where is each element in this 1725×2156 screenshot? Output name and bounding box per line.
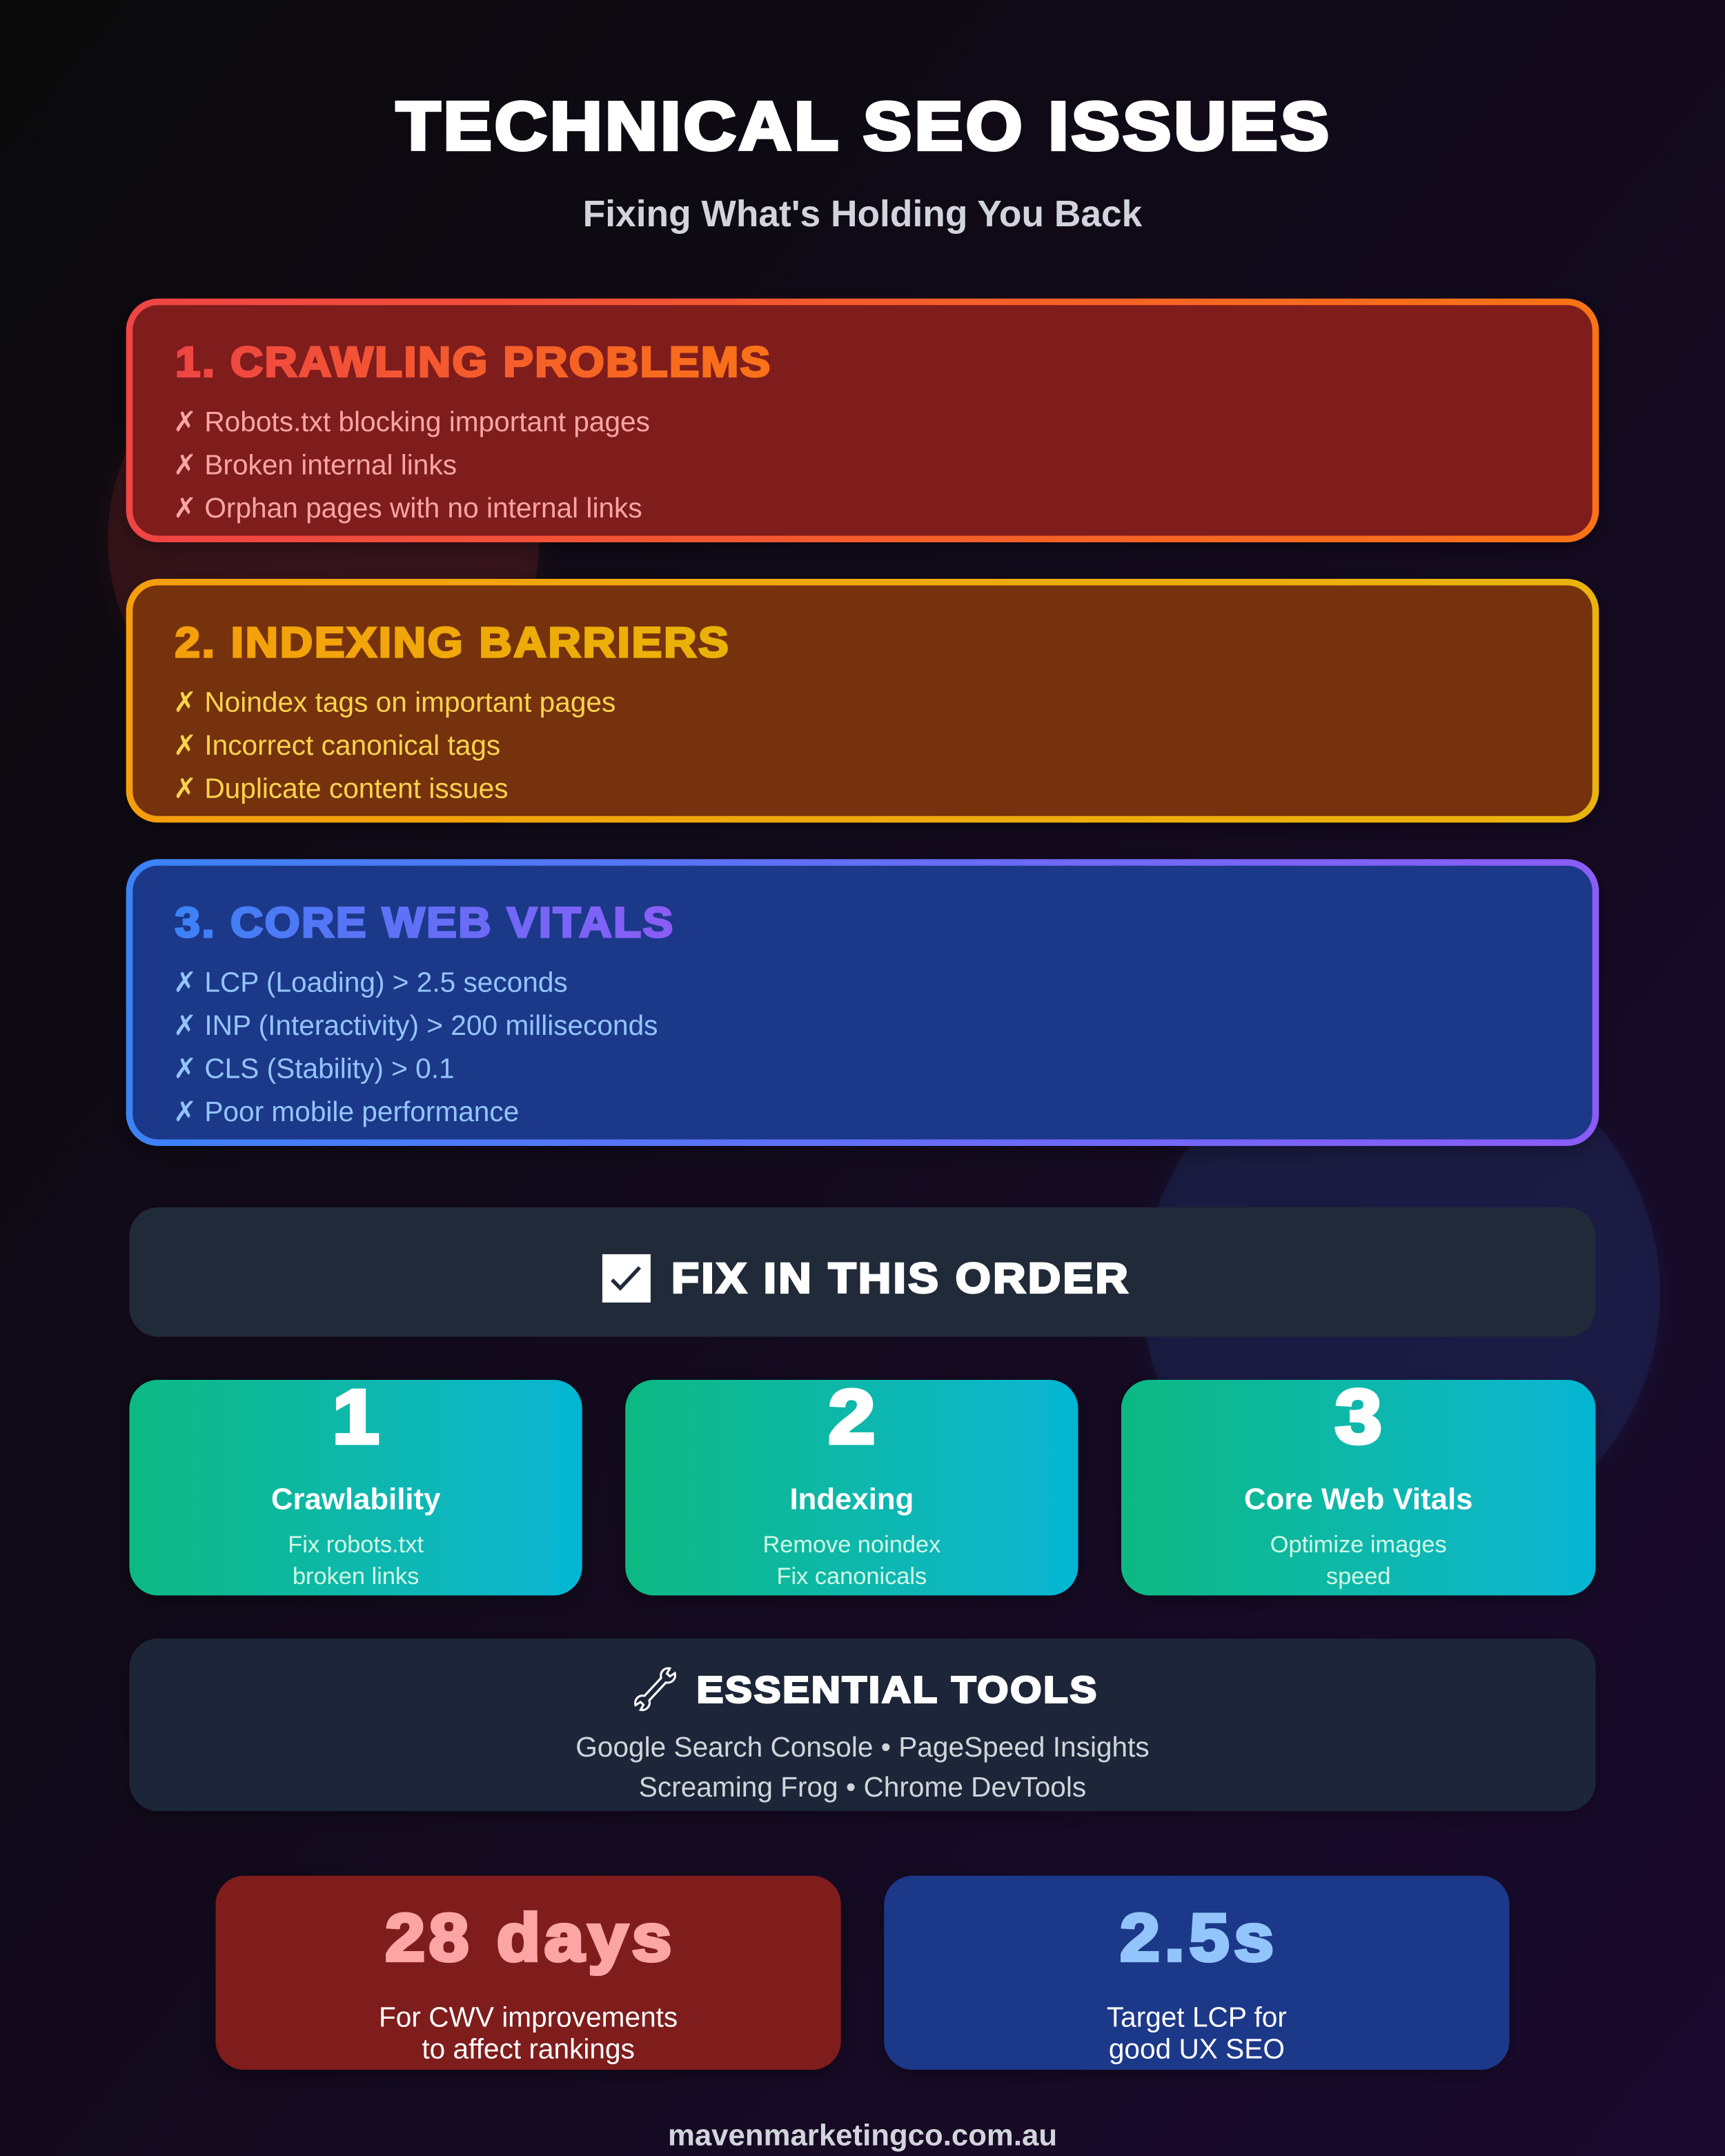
step card 3: core web vitals: Core Web Vitals (1244, 1483, 1472, 1516)
title: TECHNICAL SEO ISSUES (396, 89, 1332, 164)
subtitle: Fixing What's Holding You Back (583, 194, 1143, 235)
step card 1: crawlability: broken links (293, 1563, 419, 1590)
text: tools list: Google Search Console • PageSpeed Insights (575, 1731, 1150, 1763)
footer: website: mavenmarketingco.com.au (668, 2118, 1057, 2152)
stat card: 28 days: to affect rankings (422, 2033, 635, 2064)
stat card: 2.5s: good UX SEO (1109, 2033, 1285, 2064)
stat card: 28 days (215, 1876, 841, 2070)
list: core web vitals issues (173, 967, 658, 1127)
list: indexing issues: ✗ Incorrect canonical tags (173, 729, 500, 761)
panel: fix in this order (130, 1207, 1595, 1337)
step card 1: crawlability: 1 (333, 1374, 379, 1459)
step card 2: indexing: Indexing (789, 1483, 914, 1516)
step card 2: indexing (625, 1374, 1078, 1595)
text: tools list (575, 1731, 1150, 1803)
list: crawling issues: ✗ Orphan pages with no internal links (173, 492, 642, 524)
icon: wrench (633, 1666, 678, 1712)
heading: indexing barriers: 2. INDEXING BARRIERS (175, 620, 731, 666)
stat card: 2.5s: Target LCP for (1107, 2001, 1287, 2033)
step card 1: crawlability: Crawlability (271, 1483, 441, 1516)
list: core web vitals issues: ✗ CLS (Stability) > 0.1 (173, 1053, 455, 1085)
heading: crawling problems: 1. CRAWLING PROBLEMS (175, 339, 772, 386)
stat card: 28 days: For CWV improvements (379, 2001, 678, 2033)
step card 3: core web vitals: Optimize images (1270, 1532, 1447, 1558)
stat card: 2.5s: 2.5s (1120, 1901, 1279, 1975)
panel: crawling problems (130, 302, 1595, 539)
heading: essential tools: ESSENTIAL TOOLS (697, 1668, 1098, 1710)
step card 2: indexing: Remove noindex (762, 1532, 940, 1558)
list: core web vitals issues: ✗ LCP (Loading) > 2.5 seconds (173, 967, 568, 998)
text: tools list: Screaming Frog • Chrome DevTools (639, 1771, 1086, 1803)
step card 3: core web vitals (1121, 1374, 1595, 1595)
step card 2: indexing: Fix canonicals (777, 1563, 927, 1590)
panel: indexing barriers (130, 582, 1595, 820)
list: crawling issues (173, 406, 650, 524)
step card 3: core web vitals: 3 (1335, 1374, 1382, 1459)
list: core web vitals issues: ✗ INP (Interactivity) > 200 milliseconds (173, 1009, 658, 1041)
step card 1: crawlability: Fix robots.txt (288, 1532, 424, 1558)
list: indexing issues: ✗ Duplicate content issues (173, 772, 509, 804)
stat card: 28 days: 28 days (385, 1901, 676, 1975)
heading: fix in this order: FIX IN THIS ORDER (671, 1255, 1130, 1302)
list: indexing issues (173, 686, 615, 804)
step card 2: indexing: 2 (829, 1374, 875, 1459)
list: crawling issues: ✗ Broken internal links (173, 449, 457, 481)
step card 1: crawlability (130, 1374, 582, 1595)
list: core web vitals issues: ✗ Poor mobile performance (173, 1096, 519, 1127)
decorative red circle (102, 317, 545, 760)
decorative blue circle (1137, 1029, 1666, 1558)
stat card: 2.5s (884, 1876, 1510, 2070)
panel: core web vitals (130, 862, 1595, 1143)
icon: check box (602, 1254, 651, 1303)
list: indexing issues: ✗ Noindex tags on important pages (173, 686, 615, 718)
heading: core web vitals: 3. CORE WEB VITALS (175, 900, 675, 947)
step card 3: core web vitals: speed (1326, 1563, 1391, 1590)
panel: essential tools (130, 1639, 1595, 1811)
list: crawling issues: ✗ Robots.txt blocking important pages (173, 406, 650, 437)
